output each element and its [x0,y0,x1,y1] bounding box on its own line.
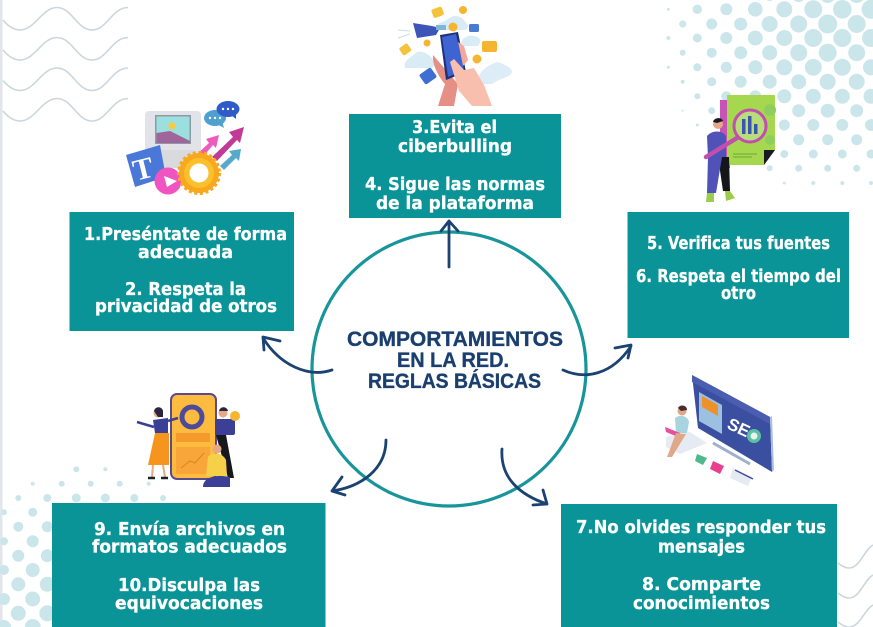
text: rules 9 and 10 [92,520,287,614]
text: rules 5 and 6: 5. Verifica tus fuentes [647,234,830,254]
central circle [312,232,586,506]
text: rules 1 and 2: privacidad de otros [95,297,277,317]
arrow: to right panel [563,345,631,375]
text: rules 5 and 6: otro [721,284,756,304]
text: rules 9 and 10: formatos adecuados [92,538,287,558]
heading: comportamientos en la red: EN LA RED. [397,349,509,372]
panel: rules 3 and 4 [349,114,561,218]
icon: person with magnifier and document [706,95,776,202]
text: rules 7 and 8: mensajes [658,538,745,558]
icon: content tools [126,101,244,194]
text: rules 1 and 2: 1.Preséntate de forma [84,225,287,245]
text: rules 1 and 2 [84,225,287,317]
panel: rules 7 and 8 [561,504,837,627]
icon: SEO monitor with seated person: SE [724,414,753,441]
arrow: to bottom-left panel [332,440,386,495]
text: rules 7 and 8 [576,518,826,614]
text: rules 3 and 4: 3.Evita el [412,118,497,138]
text: rules 7 and 8: 7.No olvides responder tus [576,518,826,538]
heading: comportamientos en la red: COMPORTAMIENTOS [347,328,563,351]
text: rules 3 and 4: de la plataforma [376,194,534,214]
text: rules 3 and 4: 4. Sigue las normas [365,175,545,195]
text: rules 9 and 10: 10.Disculpa las [118,576,260,596]
text: rules 9 and 10: 9. Envía archivos en [94,520,285,540]
panel: rules 9 and 10 [52,503,326,627]
arrow: to top panel [441,221,458,267]
icon: SEO monitor with seated person [665,375,774,486]
text: rules 7 and 8: 8. Comparte [642,575,761,595]
text: rules 3 and 4 [365,118,545,214]
panel: rules 5 and 6 [628,212,849,338]
text: rules 5 and 6: 6. Respeta el tiempo del [636,267,841,287]
heading: comportamientos en la red: REGLAS BÁSICAS [368,370,541,393]
text: rules 9 and 10: equivocaciones [115,594,263,614]
icon: team around a phone [137,394,240,487]
panel: rules 1 and 2 [70,212,294,331]
arrow: to left panel [263,337,332,372]
text: rules 5 and 6 [636,234,841,304]
text: rules 1 and 2: 2. Respeta la [125,280,246,300]
icon: content tools: T [130,151,157,188]
text: rules 1 and 2: adecuada [138,243,233,263]
icon: hands with phone and social media [398,6,512,106]
arrow: to bottom-right panel [502,449,547,505]
text: rules 7 and 8: conocimientos [633,594,770,614]
heading: comportamientos en la red [347,328,563,393]
text: rules 3 and 4: ciberbulling [398,137,512,157]
